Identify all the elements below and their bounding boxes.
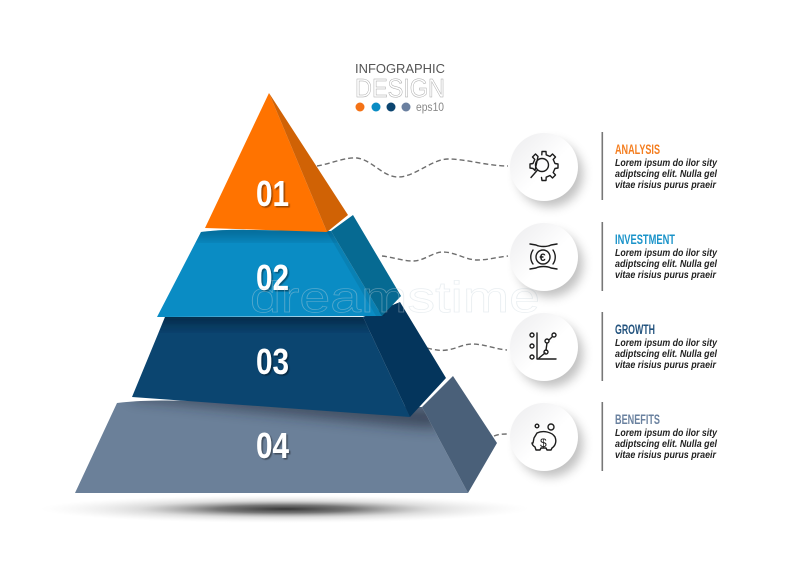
description: vitae risius purus praeir bbox=[615, 360, 717, 371]
description: vitae risius purus praeir bbox=[615, 180, 717, 191]
description bbox=[615, 338, 717, 371]
tier 3 bbox=[132, 302, 446, 417]
description: adiptscing elit. Nulla gel bbox=[615, 439, 717, 450]
icon: piggy bank bbox=[532, 424, 556, 450]
description: Lorem ipsum do ilor sity bbox=[615, 428, 717, 439]
icon: line chart bbox=[530, 333, 556, 359]
heading: BENEFITS bbox=[615, 411, 660, 427]
description: Lorem ipsum do ilor sity bbox=[615, 158, 717, 169]
tier 1 bbox=[205, 93, 348, 232]
divider bbox=[602, 402, 603, 471]
ground shadow bbox=[40, 495, 530, 523]
pyramid bbox=[75, 93, 497, 493]
label 01: 01 bbox=[256, 173, 289, 214]
description: adiptscing elit. Nulla gel bbox=[615, 349, 717, 360]
icon: euro exchange bbox=[530, 244, 557, 269]
label 03: 03 bbox=[256, 341, 289, 382]
circle badge bbox=[510, 223, 583, 297]
connector: growth bbox=[427, 344, 507, 350]
divider bbox=[602, 222, 603, 291]
heading: INVESTMENT bbox=[615, 231, 675, 247]
connector: investment bbox=[382, 252, 508, 261]
description: vitae risius purus praeir bbox=[615, 270, 717, 281]
circle badge bbox=[510, 133, 583, 207]
item: analysis bbox=[510, 132, 717, 207]
description: Lorem ipsum do ilor sity bbox=[615, 338, 717, 349]
eps label: eps10 bbox=[416, 100, 444, 114]
description bbox=[615, 428, 717, 461]
title: design: DESIGN bbox=[355, 73, 445, 103]
description: vitae risius purus praeir bbox=[615, 450, 717, 461]
item: benefits bbox=[510, 402, 717, 477]
heading: GROWTH bbox=[615, 321, 655, 337]
description: Lorem ipsum do ilor sity bbox=[615, 248, 717, 259]
tier 2 bbox=[157, 215, 401, 317]
divider bbox=[602, 132, 603, 200]
icon: piggy bank: $ bbox=[540, 436, 547, 450]
divider bbox=[602, 312, 603, 381]
title: infographic: INFOGRAPHIC bbox=[355, 61, 445, 76]
circle badge bbox=[510, 403, 583, 477]
label 02: 02 bbox=[256, 257, 289, 298]
label 04: 04 bbox=[256, 425, 289, 466]
description: adiptscing elit. Nulla gel bbox=[615, 259, 717, 270]
icon: gear with magnifier bbox=[530, 152, 558, 180]
description: adiptscing elit. Nulla gel bbox=[615, 169, 717, 180]
heading: ANALYSIS bbox=[615, 141, 660, 157]
connector: benefits bbox=[494, 434, 508, 436]
item: investment bbox=[510, 222, 717, 297]
tier 4 bbox=[75, 376, 497, 493]
connector: analysis bbox=[317, 158, 508, 177]
watermark: dreamstime bbox=[250, 273, 540, 322]
title block bbox=[355, 61, 445, 114]
icon: euro exchange: € bbox=[540, 252, 546, 264]
item: growth bbox=[510, 312, 717, 387]
description bbox=[615, 158, 717, 191]
colour dots bbox=[356, 102, 410, 112]
circle badge bbox=[510, 313, 583, 387]
description bbox=[615, 248, 717, 281]
